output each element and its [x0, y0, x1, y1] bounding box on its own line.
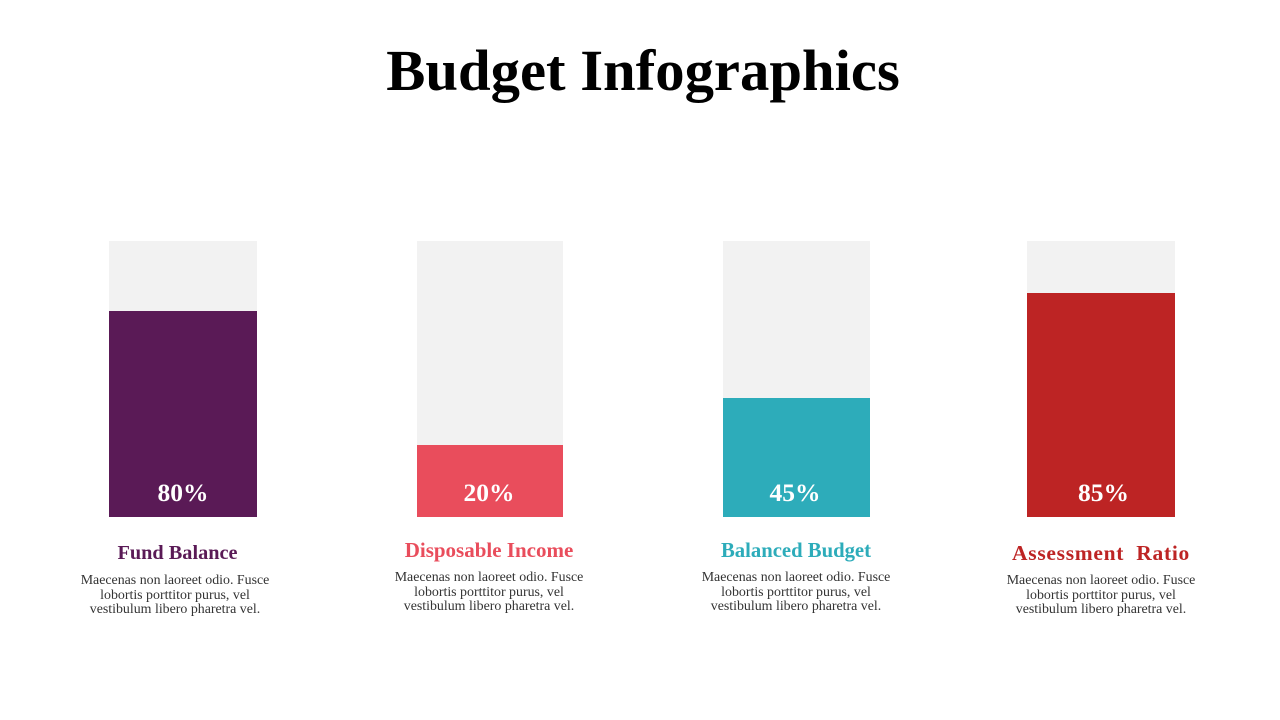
text: assessment ratio description: Maecenas non laoreet odio. Fusce — [1007, 573, 1195, 588]
text: balanced budget description: lobortis porttitor purus, vel — [721, 584, 871, 600]
value: 85%: 85% — [1078, 478, 1129, 507]
text: disposable income description: lobortis porttitor purus, vel — [414, 584, 564, 600]
bar track: assessment ratio — [1027, 241, 1175, 517]
bar fill: 85% — [1027, 293, 1175, 517]
text: balanced budget description — [702, 570, 890, 614]
text: balanced budget description: vestibulum libero pharetra vel. — [711, 599, 881, 614]
bar fill: 20% — [417, 445, 563, 517]
heading: balanced budget: Balanced Budget — [721, 540, 871, 562]
bar track: disposable income — [417, 241, 563, 517]
heading: fund balance: Fund Balance — [117, 542, 238, 564]
text: balanced budget description: Maecenas non laoreet odio. Fusce — [702, 570, 890, 585]
value: 20%: 20% — [464, 478, 514, 507]
value: 45%: 45% — [770, 478, 820, 507]
bar fill: 80% — [109, 311, 257, 517]
value: 80%: 80% — [158, 478, 208, 507]
text: fund balance description — [81, 573, 269, 617]
panel: fund balance — [81, 241, 269, 617]
text: disposable income description: Maecenas non laoreet odio. Fusce — [395, 570, 583, 585]
text: fund balance description: vestibulum libero pharetra vel. — [90, 602, 260, 617]
text: assessment ratio description: vestibulum libero pharetra vel. — [1016, 602, 1186, 617]
bar fill: 45% — [723, 398, 870, 517]
heading: assessment ratio: Assessment Ratio — [1012, 541, 1190, 565]
bar track: balanced budget — [723, 241, 870, 517]
title: Budget Infographics — [386, 38, 900, 103]
panel: balanced budget — [702, 241, 890, 614]
panel: assessment ratio — [1007, 241, 1195, 617]
heading: disposable income: Disposable Income — [405, 538, 573, 562]
panel: disposable income — [395, 241, 583, 614]
text: assessment ratio description — [1007, 573, 1195, 617]
text: disposable income description: vestibulum libero pharetra vel. — [404, 599, 574, 614]
bar track: fund balance — [109, 241, 257, 517]
text: fund balance description: Maecenas non laoreet odio. Fusce — [81, 573, 269, 588]
text: assessment ratio description: lobortis porttitor purus, vel — [1026, 588, 1176, 602]
text: disposable income description — [395, 570, 583, 614]
text: fund balance description: lobortis porttitor purus, vel — [100, 588, 250, 602]
